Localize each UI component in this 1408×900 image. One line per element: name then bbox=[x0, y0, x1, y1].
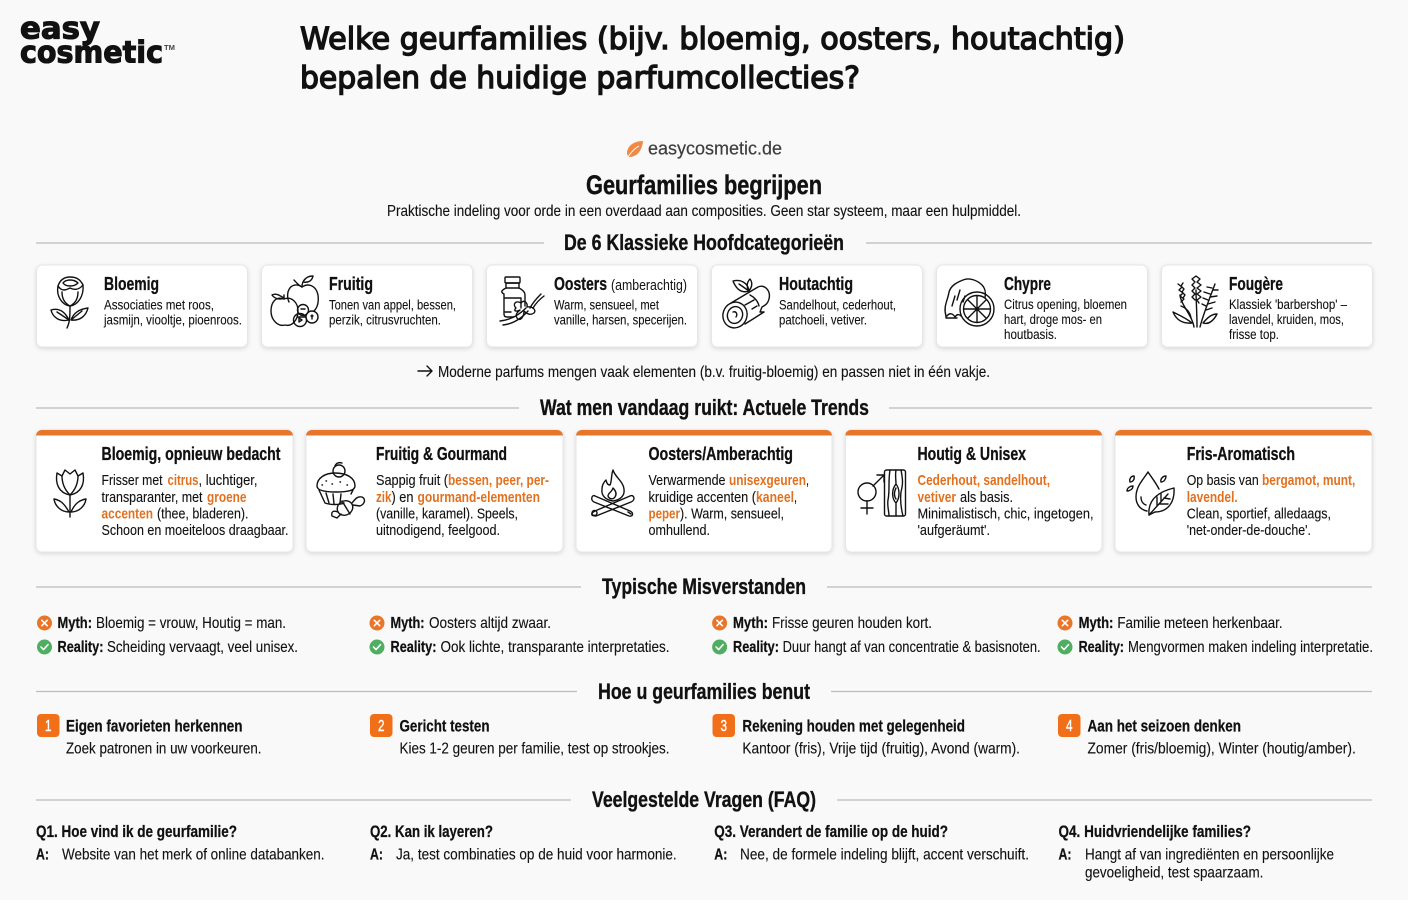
section heading: misverstanden: Typische Misverstanden bbox=[602, 574, 806, 599]
panel: trend houtig en unisex: als basis. bbox=[960, 489, 1013, 506]
myth column 3: Frisse geuren houden kort. bbox=[772, 615, 932, 632]
panel: Chypre: houtbasis. bbox=[1004, 327, 1057, 342]
panel: Chypre: Citrus opening, bloemen bbox=[1004, 297, 1127, 312]
step 2 bbox=[370, 714, 670, 758]
icon: bottle with vanilla bbox=[500, 277, 544, 325]
panel: Bloemig: Bloemig bbox=[104, 274, 159, 294]
myth column 1: Bloemig = vrouw, Houtig = man. bbox=[96, 615, 286, 632]
myth column 1: Myth: bbox=[58, 615, 92, 632]
section heading: hoe u geurfamilies benut: Hoe u geurfamilies benut bbox=[598, 679, 810, 704]
icon: moss and citrus bbox=[945, 279, 994, 326]
panel: Fruitig: Tonen van appel, bessen, bbox=[329, 298, 456, 312]
panel: trend houtig en unisex bbox=[846, 430, 1102, 552]
panel: Houtachtig bbox=[712, 265, 922, 347]
panel: trend bloemig: , luchtiger, bbox=[198, 472, 258, 489]
myth column 1 bbox=[37, 615, 298, 656]
panel: trend fruitig en gourmand: bessen, peer, per- bbox=[448, 472, 549, 489]
title: Welke geurfamilies (bijv. bloemig, oosters, houtachtig) bbox=[300, 22, 1125, 57]
icon: myth cross bbox=[1058, 616, 1072, 630]
myth column 4: Myth: bbox=[1079, 615, 1113, 632]
step 2: 2 bbox=[378, 718, 384, 735]
step 1: 1 bbox=[45, 718, 52, 735]
icon: campfire bbox=[592, 470, 634, 516]
panel: trend oosters: kaneel bbox=[756, 489, 794, 506]
FAQ 2 bbox=[370, 822, 677, 864]
panel: trend fruitig en gourmand bbox=[306, 430, 563, 552]
panel: trend fruitig en gourmand: (vanille, karamel). Speels, bbox=[376, 506, 518, 522]
panel: trend oosters: ). Warm, sensueel, bbox=[680, 506, 784, 522]
panel: trend bloemig bbox=[36, 430, 293, 552]
subtitle: Praktische indeling voor orde in een overdaad aan composities. Geen star systeem, maar een hulpmiddel. bbox=[387, 203, 1021, 220]
icon: reality check bbox=[712, 640, 727, 654]
icon: lavender bbox=[1173, 276, 1218, 327]
panel: trend oosters: Oosters/Amberachtig bbox=[648, 444, 793, 464]
myth column 4: Familie meteen herkenbaar. bbox=[1117, 615, 1283, 632]
panel: trend bloemig: accenten bbox=[102, 506, 153, 522]
panel: Bloemig: jasmijn, viooltje, pioenroos. bbox=[103, 312, 242, 328]
FAQ 1 bbox=[36, 822, 324, 864]
icon: fruit bbox=[271, 276, 318, 326]
brand line: easycosmetic.de: easycosmetic.de bbox=[648, 138, 782, 158]
myth column 2: Myth: bbox=[390, 615, 424, 632]
panel: trend fris-aromatisch: Fris-Aromatisch bbox=[1187, 444, 1295, 464]
panel: trend houtig en unisex: 'aufgeräumt'. bbox=[918, 522, 990, 539]
panel: trend bloemig: citrus bbox=[168, 472, 198, 489]
panel: Bloemig bbox=[36, 265, 248, 347]
step 1: Eigen favorieten herkennen bbox=[66, 717, 242, 736]
panel: trend bloemig: (thee, bladeren). bbox=[157, 506, 248, 522]
step 3: Rekening houden met gelegenheid bbox=[742, 717, 965, 736]
step 3 bbox=[712, 714, 1020, 758]
myth column 4: Reality: bbox=[1079, 639, 1124, 656]
myth column 1: Reality: bbox=[58, 639, 104, 656]
panel: Bloemig: Associaties met roos, bbox=[104, 298, 214, 312]
icon: tulip bbox=[54, 470, 86, 517]
panel: trend fris-aromatisch: 'net-onder-de-douche'. bbox=[1187, 522, 1311, 539]
myth column 2: Oosters altijd zwaar. bbox=[429, 615, 551, 632]
myth column 3: Myth: bbox=[733, 615, 768, 632]
step 2: Kies 1-2 geuren per familie, test op strookjes. bbox=[400, 740, 670, 758]
icon: reality check bbox=[1058, 640, 1072, 654]
panel: trend bloemig: groene bbox=[207, 489, 246, 506]
panel: Fruitig: perzik, citrusvruchten. bbox=[329, 312, 441, 328]
panel: trend fruitig en gourmand: gourmand-elementen bbox=[418, 489, 540, 506]
section heading: klassieke hoofdcategorieen: De 6 Klassieke Hoofdcategorieën bbox=[564, 230, 844, 255]
panel: Fougere: lavendel, kruiden, mos, bbox=[1229, 312, 1344, 327]
panel: trend fris-aromatisch: Op basis van bbox=[1187, 472, 1259, 489]
FAQ 2: Ja, test combinaties op de huid voor harmonie. bbox=[396, 846, 677, 864]
icon: water drop and leaf bbox=[1127, 472, 1174, 515]
FAQ 3: Nee, de formele indeling blijft, accent verschuift. bbox=[740, 846, 1029, 864]
panel: Houtachtig: Sandelhout, cederhout, bbox=[779, 298, 896, 312]
panel: trend houtig en unisex: Cederhout, sandelhout, bbox=[918, 472, 1050, 489]
FAQ 4: gevoeligheid, test spaarzaam. bbox=[1085, 864, 1263, 882]
step 4: Zomer (fris/bloemig), Winter (houtig/amber). bbox=[1088, 740, 1356, 758]
panel: trend bloemig: Schoon en moeiteloos draagbaar. bbox=[102, 522, 288, 539]
panel: trend fruitig en gourmand: uitnodigend, feelgood. bbox=[376, 522, 500, 539]
panel: Oosters: (amberachtig) bbox=[611, 277, 687, 294]
panel: trend fris-aromatisch: Clean, sportief, alledaags, bbox=[1187, 506, 1331, 522]
panel: trend oosters bbox=[576, 430, 832, 552]
panel: trend fruitig en gourmand: Fruitig & Gourmand bbox=[376, 444, 507, 464]
panel: trend houtig en unisex: Minimalistisch, chic, ingetogen, bbox=[918, 506, 1094, 522]
step 4 bbox=[1058, 714, 1356, 758]
panel: trend oosters: peper bbox=[648, 506, 680, 522]
panel: Houtachtig: patchoeli, vetiver. bbox=[779, 312, 867, 328]
FAQ 1: Website van het merk of online databanken. bbox=[62, 846, 324, 864]
panel: Chypre: hart, droge mos- en bbox=[1004, 312, 1102, 327]
panel: Houtachtig: Houtachtig bbox=[779, 274, 853, 294]
panel: Fougere: frisse top. bbox=[1229, 327, 1279, 342]
panel: Oosters: Oosters bbox=[554, 274, 607, 294]
icon: rose bbox=[51, 277, 88, 328]
logo: easy cosmetic: cosmetic bbox=[20, 36, 163, 70]
section heading: FAQ: Veelgestelde Vragen (FAQ) bbox=[592, 787, 816, 812]
icon: myth cross bbox=[37, 616, 52, 630]
myth column 2: Reality: bbox=[390, 639, 436, 656]
FAQ 1: Q1. Hoe vind ik de geurfamilie? bbox=[36, 822, 237, 841]
myth column 3 bbox=[712, 615, 1041, 656]
logo: easy cosmetic: TM bbox=[164, 45, 175, 52]
FAQ 2: A: bbox=[370, 846, 383, 864]
panel: trend fruitig en gourmand: Sappig fruit ( bbox=[376, 472, 448, 489]
FAQ 3: A: bbox=[714, 846, 727, 864]
panel: trend bloemig: Bloemig, opnieuw bedacht bbox=[102, 444, 281, 464]
icon: gender symbol and wood bbox=[858, 470, 906, 516]
step 2: Gericht testen bbox=[400, 717, 490, 736]
panel: Chypre bbox=[936, 265, 1148, 347]
step 4: 4 bbox=[1066, 718, 1073, 735]
section heading: actuele trends: Wat men vandaag ruikt: Actuele Trends bbox=[540, 395, 869, 420]
icon: tart and candy bbox=[317, 463, 364, 518]
panel: Fougere: Klassiek 'barbershop' – bbox=[1229, 297, 1347, 312]
myth column 2: Ook lichte, transparante interpretaties. bbox=[440, 639, 670, 656]
FAQ 3 bbox=[714, 822, 1029, 864]
note with arrow: Moderne parfums mengen vaak elementen (b.v. fruitig-bloemig) en passen niet in één vakje. bbox=[438, 364, 990, 381]
icon: log bbox=[719, 279, 769, 331]
myth column 2 bbox=[370, 615, 670, 656]
panel: Fruitig: Fruitig bbox=[329, 274, 373, 294]
panel: Fruitig bbox=[262, 265, 472, 347]
panel: trend houtig en unisex: vetiver bbox=[918, 489, 956, 506]
title bbox=[300, 22, 1125, 96]
panel: Fougere: Fougère bbox=[1229, 274, 1283, 294]
panel: trend fris-aromatisch bbox=[1115, 430, 1372, 552]
icon: reality check bbox=[370, 640, 384, 654]
step 4: Aan het seizoen denken bbox=[1088, 717, 1241, 736]
icon: myth cross bbox=[370, 616, 384, 630]
panel: Fougere bbox=[1162, 265, 1372, 347]
panel: trend fris-aromatisch: bergamot, munt, bbox=[1262, 472, 1355, 489]
panel: trend oosters: , bbox=[794, 489, 797, 506]
FAQ 4 bbox=[1058, 822, 1334, 882]
panel: trend oosters: , bbox=[806, 472, 809, 489]
panel: Oosters bbox=[486, 265, 698, 347]
panel: trend oosters: unisexgeuren bbox=[729, 472, 806, 489]
panel: trend bloemig: Frisser met bbox=[102, 472, 163, 489]
icon: reality check bbox=[37, 640, 52, 654]
logo: easy cosmetic bbox=[20, 12, 175, 70]
FAQ 2: Q2. Kan ik layeren? bbox=[370, 822, 493, 841]
main heading: Geurfamilies begrijpen bbox=[586, 170, 822, 200]
panel: trend fruitig en gourmand: zik bbox=[376, 489, 392, 506]
myth column 3: Reality: bbox=[733, 639, 779, 656]
panel: Oosters: vanille, harsen, specerijen. bbox=[554, 312, 687, 328]
panel: Oosters: Warm, sensueel, met bbox=[554, 298, 659, 312]
logo: easy cosmetic: easy bbox=[20, 12, 100, 46]
myth column 3: Duur hangt af van concentratie & basisnoten. bbox=[783, 639, 1041, 656]
FAQ 4: A: bbox=[1058, 846, 1072, 864]
myth column 1: Scheiding vervaagt, veel unisex. bbox=[107, 639, 298, 656]
step 3: 3 bbox=[720, 718, 727, 735]
FAQ 3: Q3. Verandert de familie op de huid? bbox=[714, 822, 948, 841]
panel: trend oosters: omhullend. bbox=[648, 522, 710, 539]
panel: trend fruitig en gourmand: ) en bbox=[392, 489, 414, 506]
FAQ 4: Hangt af van ingrediënten en persoonlijke bbox=[1085, 846, 1334, 864]
step 3: Kantoor (fris), Vrije tijd (fruitig), Avond (warm). bbox=[742, 740, 1020, 758]
panel: Chypre: Chypre bbox=[1004, 274, 1051, 294]
FAQ 1: A: bbox=[36, 846, 49, 864]
panel: trend oosters: kruidige accenten ( bbox=[648, 489, 756, 506]
FAQ 4: Q4. Huidvriendelijke families? bbox=[1058, 822, 1251, 841]
panel: trend houtig en unisex: Houtig & Unisex bbox=[918, 444, 1026, 464]
panel: trend bloemig: transparanter, met bbox=[102, 489, 203, 506]
icon: myth cross bbox=[712, 616, 727, 630]
title: bepalen de huidige parfumcollecties? bbox=[300, 61, 860, 96]
step 1 bbox=[37, 714, 262, 758]
myth column 4 bbox=[1058, 615, 1373, 656]
panel: trend fris-aromatisch: lavendel. bbox=[1187, 489, 1238, 506]
step 1: Zoek patronen in uw voorkeuren. bbox=[66, 740, 262, 758]
panel: trend oosters: Verwarmende bbox=[648, 472, 726, 489]
